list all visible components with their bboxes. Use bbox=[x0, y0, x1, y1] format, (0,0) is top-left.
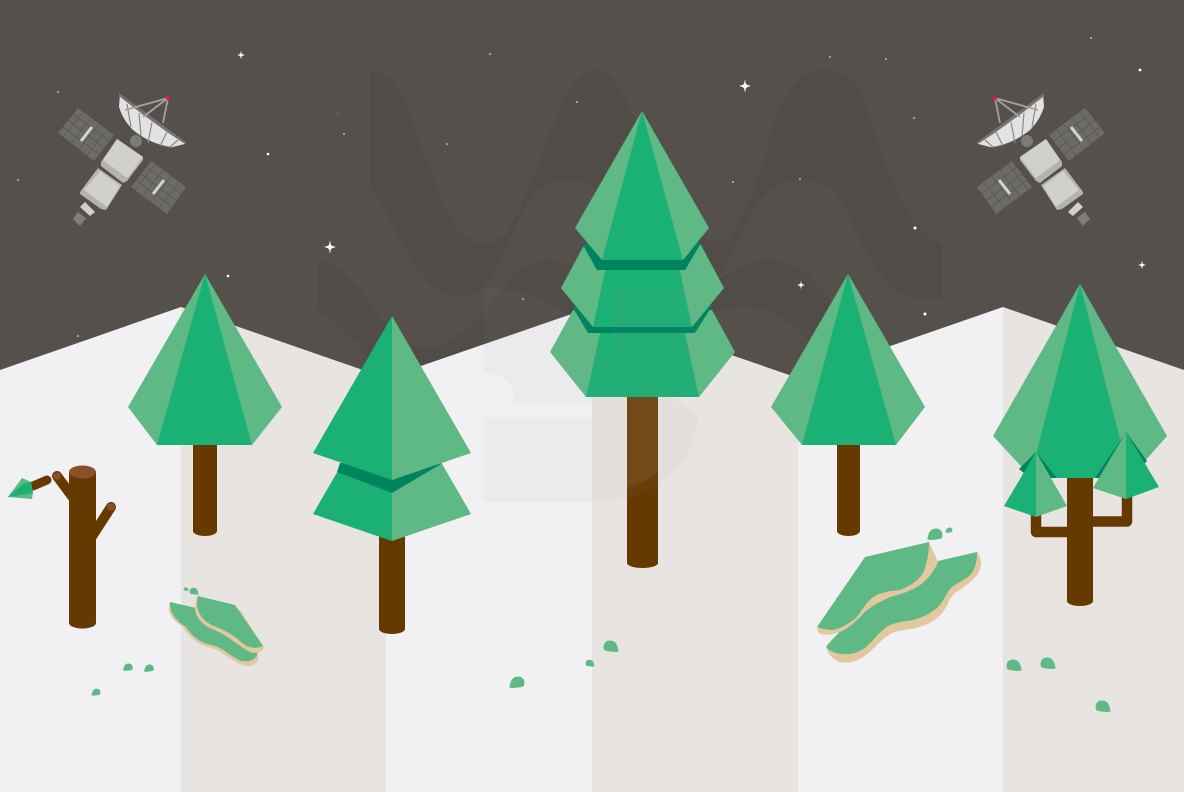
ground: alternating snow columns bbox=[0, 307, 1184, 792]
tree: tall centre pine bbox=[550, 111, 735, 568]
satellite: right bbox=[976, 93, 1105, 226]
watermark: dark waves in the sky bbox=[318, 70, 942, 400]
terrain patch: large bbox=[817, 542, 981, 663]
tree: right pine bbox=[771, 274, 925, 536]
tree: two-tier pine bbox=[313, 316, 471, 634]
watermark: faint translucent shapes bbox=[484, 288, 700, 502]
watermark: lighter tint on centre trunk bbox=[627, 397, 658, 488]
tree: left pine bbox=[128, 274, 282, 536]
dead tree with broken branch bbox=[8, 466, 115, 628]
stars bbox=[17, 37, 1146, 337]
tree: branching pine with small crowns bbox=[993, 284, 1167, 606]
satellite: left bbox=[58, 93, 187, 226]
fallen leaves bbox=[91, 528, 1111, 712]
terrain patch: small bbox=[169, 596, 264, 666]
